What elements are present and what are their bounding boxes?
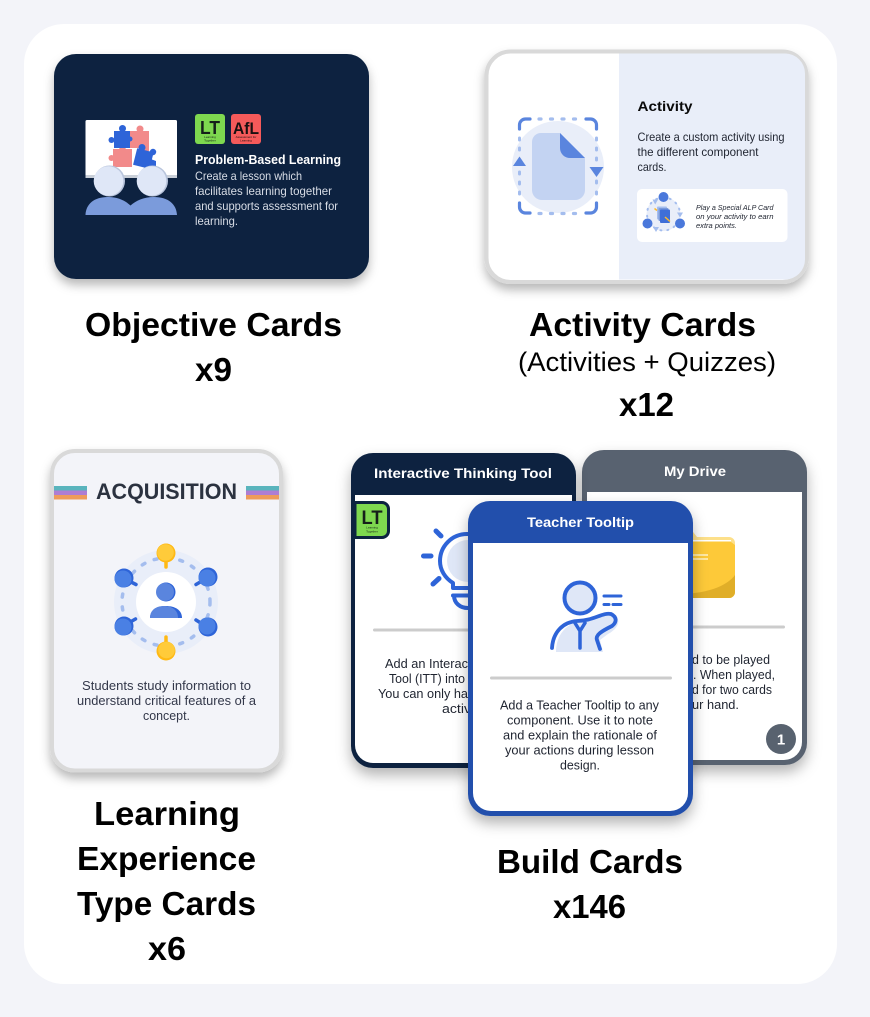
panel: activity card [486,52,806,282]
label: build cards: Build Cards [497,843,683,880]
card description [500,698,660,772]
card title: Teacher Tooltip [527,514,634,530]
activity description: the different component [638,145,759,159]
callout: special ALP card: on your activity to earn [696,214,774,221]
objective description: facilitates learning together [195,184,332,198]
cost badge: 1 [777,732,785,748]
badge: LT: Together [366,530,378,534]
objective description: and supports assessment for [195,199,338,213]
card description [620,653,775,712]
description [77,679,256,723]
card description: component. Use it to note [507,714,653,728]
cost badge [766,724,796,754]
card description [378,657,472,716]
activity description: Create a custom activity using [638,130,784,144]
label: learning experience type cards: x6 [148,930,186,967]
badge: LT [195,114,225,144]
description: understand critical features of a [77,694,256,708]
activity title: Activity [638,98,693,114]
heading: acquisition: ACQUISITION [96,479,237,504]
activity description: cards. [638,160,666,174]
label: learning experience type cards: Type Cards [77,885,256,922]
label: learning experience type cards [77,795,256,967]
card description: and explain the rationale of [503,728,658,742]
activity description [638,130,784,174]
label: objective cards: Objective Cards [85,306,342,343]
label: learning experience type cards: Learning [94,795,240,832]
card description: design. [560,758,600,772]
label: activity cards: Activity Cards [529,306,756,343]
panel: teacher tooltip card [468,501,693,816]
card description: d for two cards [692,683,772,697]
label: activity cards [518,306,776,423]
heading stripes [54,486,279,500]
label: objective cards: x9 [195,351,232,388]
description: concept. [143,709,190,723]
card title: Interactive Thinking Tool [374,465,552,481]
panel: interactive thinking tool card [351,453,576,768]
objective description: Create a lesson which [195,169,302,183]
badge: LT: Learning [204,135,216,139]
description: Students study information to [82,679,251,693]
label: build cards: x146 [553,888,626,925]
label: objective cards [85,306,342,388]
badge: LT: Learning [366,526,378,530]
icon: teacher [552,582,621,652]
icon: document with dashed frame [512,119,604,214]
badge: AfL [231,114,261,144]
card description: your actions during lesson [505,744,654,758]
callout: special ALP card: extra points. [696,223,737,230]
panel: my drive card [582,450,807,765]
panel: learning experience card [52,451,281,770]
icon: student network [114,544,218,660]
label: activity cards: (Activities + Quizzes) [518,347,776,377]
card title: My Drive [664,463,726,479]
label: learning experience type cards: Experience [77,840,256,877]
icon: folder [650,528,735,598]
callout: special ALP card: Play a Special ALP Card [696,205,775,212]
card description: Add a Teacher Tooltip to any [500,698,660,712]
icon: people at puzzle whiteboard [86,120,177,215]
badge: LT: LT [200,118,220,138]
card description: you can trade [620,683,690,697]
objective title: Problem-Based Learning [195,153,341,167]
objective description: learning. [195,214,238,228]
card description: A card is require [620,653,690,667]
badge: AfL: Learning [240,138,252,142]
card description: activ [442,702,472,716]
icon: ALP cycle [642,192,685,232]
badge: LT: Together [204,138,216,142]
objective description [195,169,338,228]
card description: You can only ha [378,687,468,701]
badge: AfL: AfL [233,119,259,138]
badge: LT: LT [362,508,383,529]
card description: from yo [650,698,690,712]
panel: objective card [54,54,369,279]
card description: Tool (ITT) into [389,672,465,686]
label: activity cards: x12 [619,386,674,423]
card description: ur hand. [692,698,739,712]
label: build cards [497,843,683,925]
card description: Add an Interac [385,657,468,671]
badge: AfL: Assessment for [236,135,256,139]
badge: LT [354,501,390,539]
callout: special ALP card [637,189,788,242]
icon: light bulb [424,531,490,608]
card description: on an activity [620,668,691,682]
card description: d to be played [692,653,770,667]
card description: . When played, [693,668,775,682]
